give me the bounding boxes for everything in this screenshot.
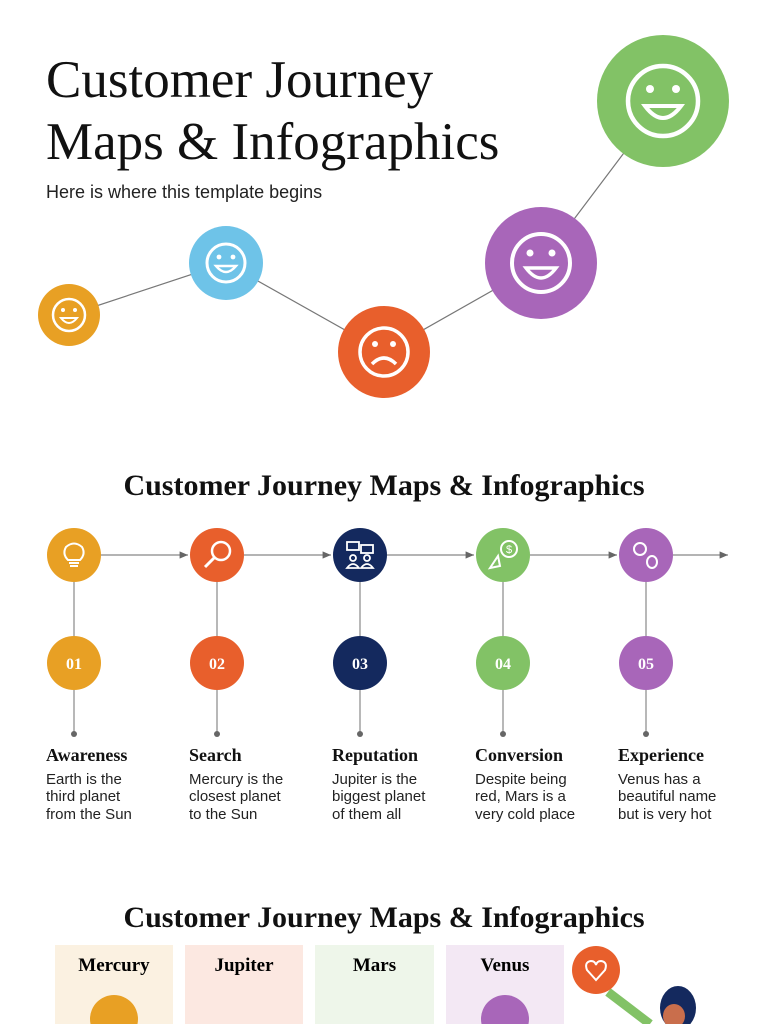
- cards: [55, 945, 564, 1024]
- number badges: 02: [209, 656, 225, 673]
- card: venus: Venus: [481, 955, 529, 976]
- step: reputation: Reputation: [332, 745, 418, 765]
- step: awareness: Earth is the third planet from the Sun: [46, 770, 132, 822]
- title: Customer Journey: [46, 51, 433, 109]
- number badges: [47, 636, 673, 690]
- number badges: 03: [352, 656, 368, 673]
- step: experience: Venus has a beautiful name but is very hot: [618, 770, 716, 822]
- card: mercury: Mercury: [78, 955, 150, 976]
- illustration: person with heart: [572, 946, 696, 1024]
- step: awareness: Awareness: [46, 745, 127, 765]
- step: experience: Experience: [618, 745, 704, 765]
- card: jupiter: [185, 945, 303, 1024]
- step: conversion: [475, 745, 575, 822]
- icon: bulb: [47, 528, 101, 582]
- step: reputation: Jupiter is the biggest planet of them all: [332, 770, 425, 822]
- icon: happy orange: [38, 284, 100, 346]
- emotion chart: [38, 35, 729, 398]
- card: mars: [315, 945, 434, 1024]
- card: jupiter: Jupiter: [214, 955, 274, 976]
- step: awareness: [46, 745, 132, 822]
- icon: click dollar: [476, 528, 530, 582]
- step: conversion: Conversion: [475, 745, 563, 765]
- step: conversion: Despite being red, Mars is a very cold place: [475, 770, 575, 822]
- journey timeline: [47, 528, 728, 737]
- subtitle: Here is where this template begins: [46, 182, 322, 202]
- step: search: Mercury is the closest planet to the Sun: [189, 770, 283, 822]
- step: reputation: [332, 745, 426, 822]
- heading 2: Customer Journey Maps & Infographics: [123, 469, 645, 502]
- step: search: [189, 745, 283, 822]
- heading 3: Customer Journey Maps & Infographics: [123, 901, 645, 934]
- card: mars: Mars: [353, 955, 396, 976]
- step: experience: [618, 745, 716, 822]
- icon: people chat: [333, 528, 387, 582]
- card: venus: [446, 945, 564, 1024]
- card: mercury: [55, 945, 173, 1024]
- icon: happy blue: [189, 226, 263, 300]
- step: search: Search: [189, 745, 242, 765]
- icon: magnifier: [190, 528, 244, 582]
- title: Maps & Infographics: [46, 113, 499, 171]
- number badges: 05: [638, 656, 654, 673]
- icon: click dollar: $: [506, 544, 512, 556]
- icon: experience: [619, 528, 673, 582]
- icon: happy green: [597, 35, 729, 167]
- number badges: 04: [495, 656, 511, 673]
- number badges: 01: [66, 656, 82, 673]
- title: [46, 51, 499, 171]
- icon: sad red: [338, 306, 430, 398]
- icon: happy purple: [485, 207, 597, 319]
